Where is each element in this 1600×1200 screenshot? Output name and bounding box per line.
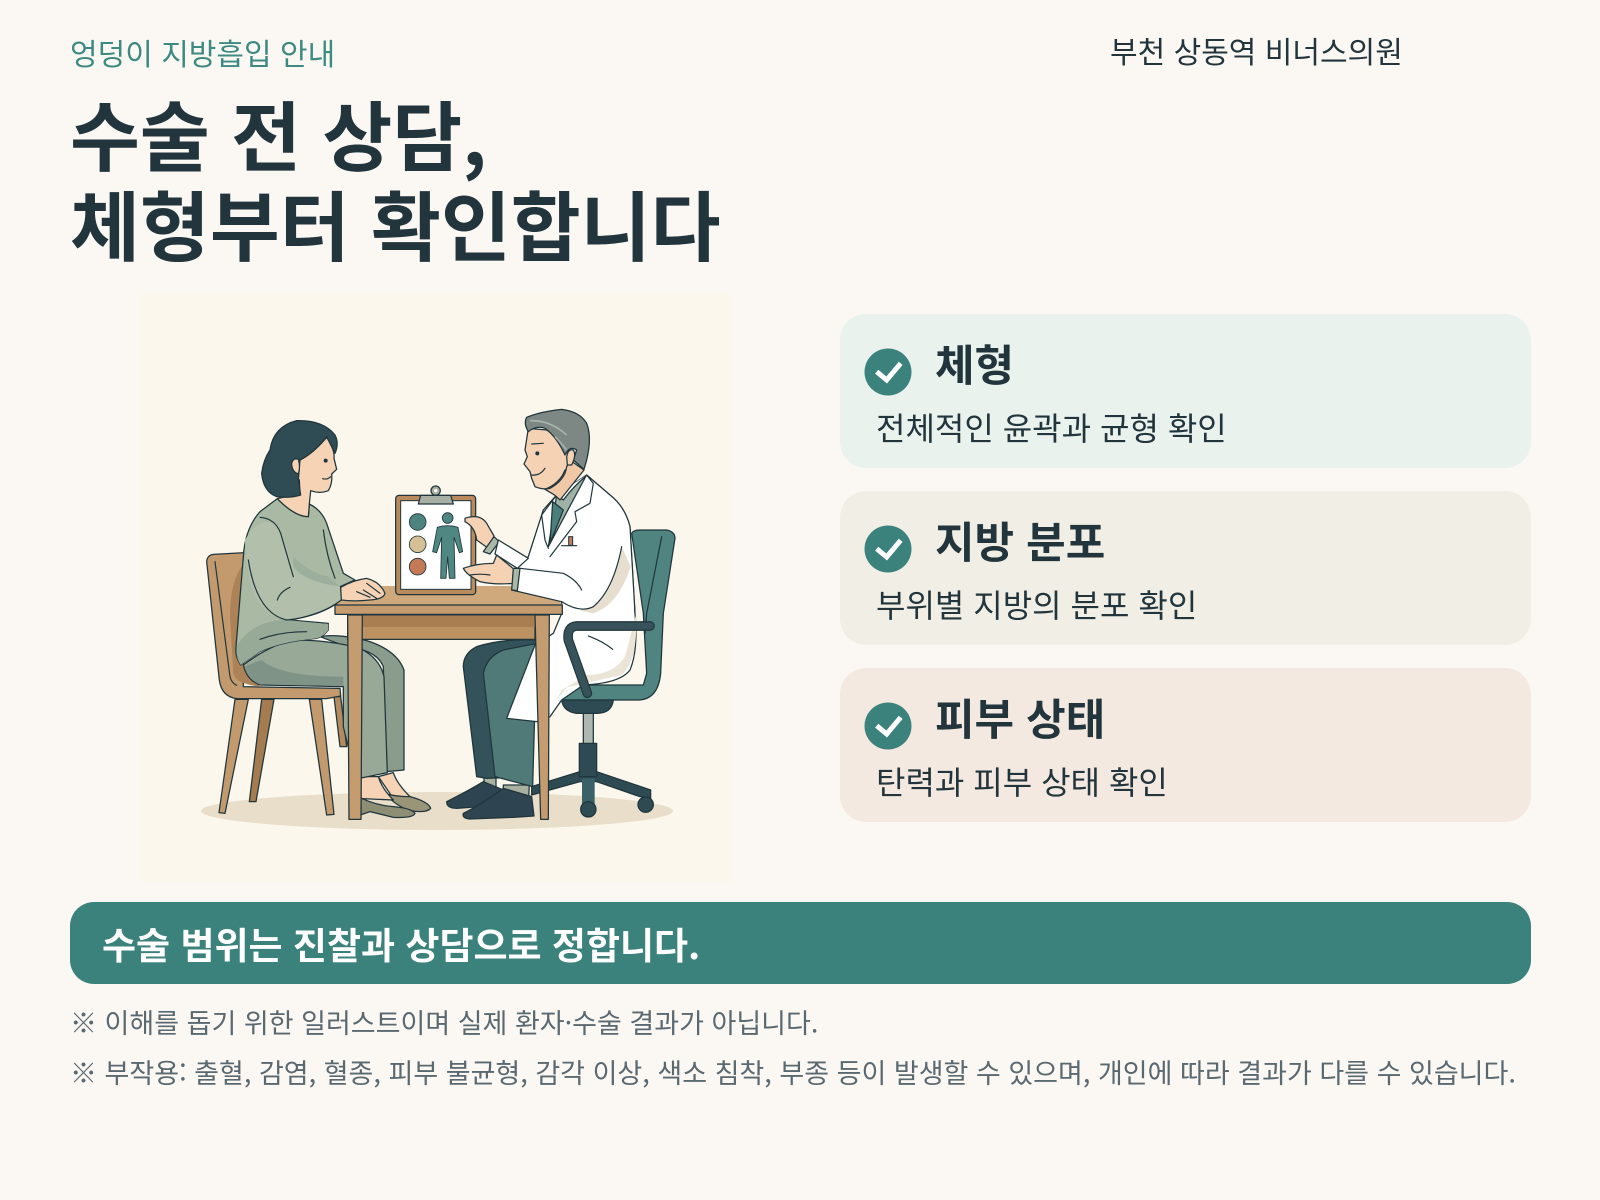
icon: check [864,526,912,572]
woman's hair [262,421,337,497]
title: 체형부터 확인합니다 [70,167,721,277]
armrest [568,626,650,693]
heading: body shape: 체형 [935,332,1014,394]
title [70,77,721,277]
footnote: side effects: ※ 부작용: 출혈, 감염, 혈종, 피부 불균형, 감각 이상, 색소 침착, 부종 등이 발생할 수 있으며, 개인에 따라 결과가 다를 수 있습니다. [70,1052,1516,1091]
description: 탄력과 피부 상태 확인 [876,758,1168,804]
description: 부위별 지방의 분포 확인 [876,581,1197,627]
footnote: illustration disclaimer: ※ 이해를 돕기 위한 일러스트이며 실제 환자·수술 결과가 아닙니다. [70,1002,818,1041]
woman's upper body [236,421,385,665]
icon: check [864,348,912,396]
doctor's arms and hands [463,517,528,591]
doctor's coat [507,475,636,722]
panel: skin condition [840,668,1531,822]
woman's hand [341,578,385,601]
doctor's chair [532,530,675,817]
woman's neck and face [277,437,337,517]
icon: check [864,702,912,750]
woman's chair [207,553,347,815]
doctor's upper coat and armrest [512,475,650,693]
illustration: consultation between patient and doctor [201,408,676,830]
heading: skin condition: 피부 상태 [935,686,1105,748]
panel: fat distribution [840,491,1531,645]
banner text: 수술 범위는 진찰과 상담으로 정합니다. [102,916,700,970]
table [335,586,562,819]
woman's legs and shoes [243,636,431,817]
panel: body shape [840,314,1531,468]
clipboard with body chart [396,486,476,595]
title: 수술 전 상담, [70,77,487,187]
doctor's head [524,409,589,500]
banner [70,902,1531,984]
doctor's trousers and shoes [447,640,537,819]
description: 전체적인 윤곽과 균형 확인 [876,404,1227,450]
floor shadow [201,792,673,830]
clinic name: 부천 상동역 비너스의원 [1110,28,1403,72]
heading: fat distribution: 지방 분포 [935,509,1105,571]
eyebrow: procedure name: 엉덩이 지방흡입 안내 [70,30,335,74]
